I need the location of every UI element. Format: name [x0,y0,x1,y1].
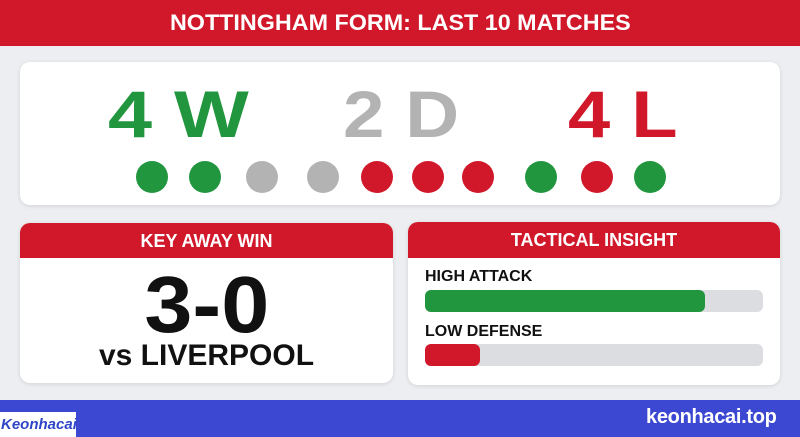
bar: low defense [425,344,763,366]
panel: key away win [20,223,393,383]
panel heading [20,223,393,258]
panel: form summary [20,62,780,205]
title banner: NOTTINGHAM FORM: LAST 10 MATCHES [170,10,630,35]
panel: tactical insight [408,222,780,385]
score: 3-0 [144,260,269,349]
footer [0,400,800,437]
panel heading [408,222,780,258]
match result dots [136,161,666,193]
label: low defense: LOW DEFENSE [425,323,542,340]
panel heading: TACTICAL INSIGHT [511,230,677,250]
draws count: 2 D [343,77,459,151]
site url: keonhacai.top [646,406,777,428]
bar: high attack [425,290,763,312]
logo [0,412,76,437]
losses count: 4 L [568,77,678,151]
title banner [0,0,800,46]
opponent: vs LIVERPOOL [99,339,314,372]
wins count: 4 W [108,77,249,151]
panel heading: KEY AWAY WIN [140,231,273,251]
label: high attack: HIGH ATTACK [425,268,532,285]
